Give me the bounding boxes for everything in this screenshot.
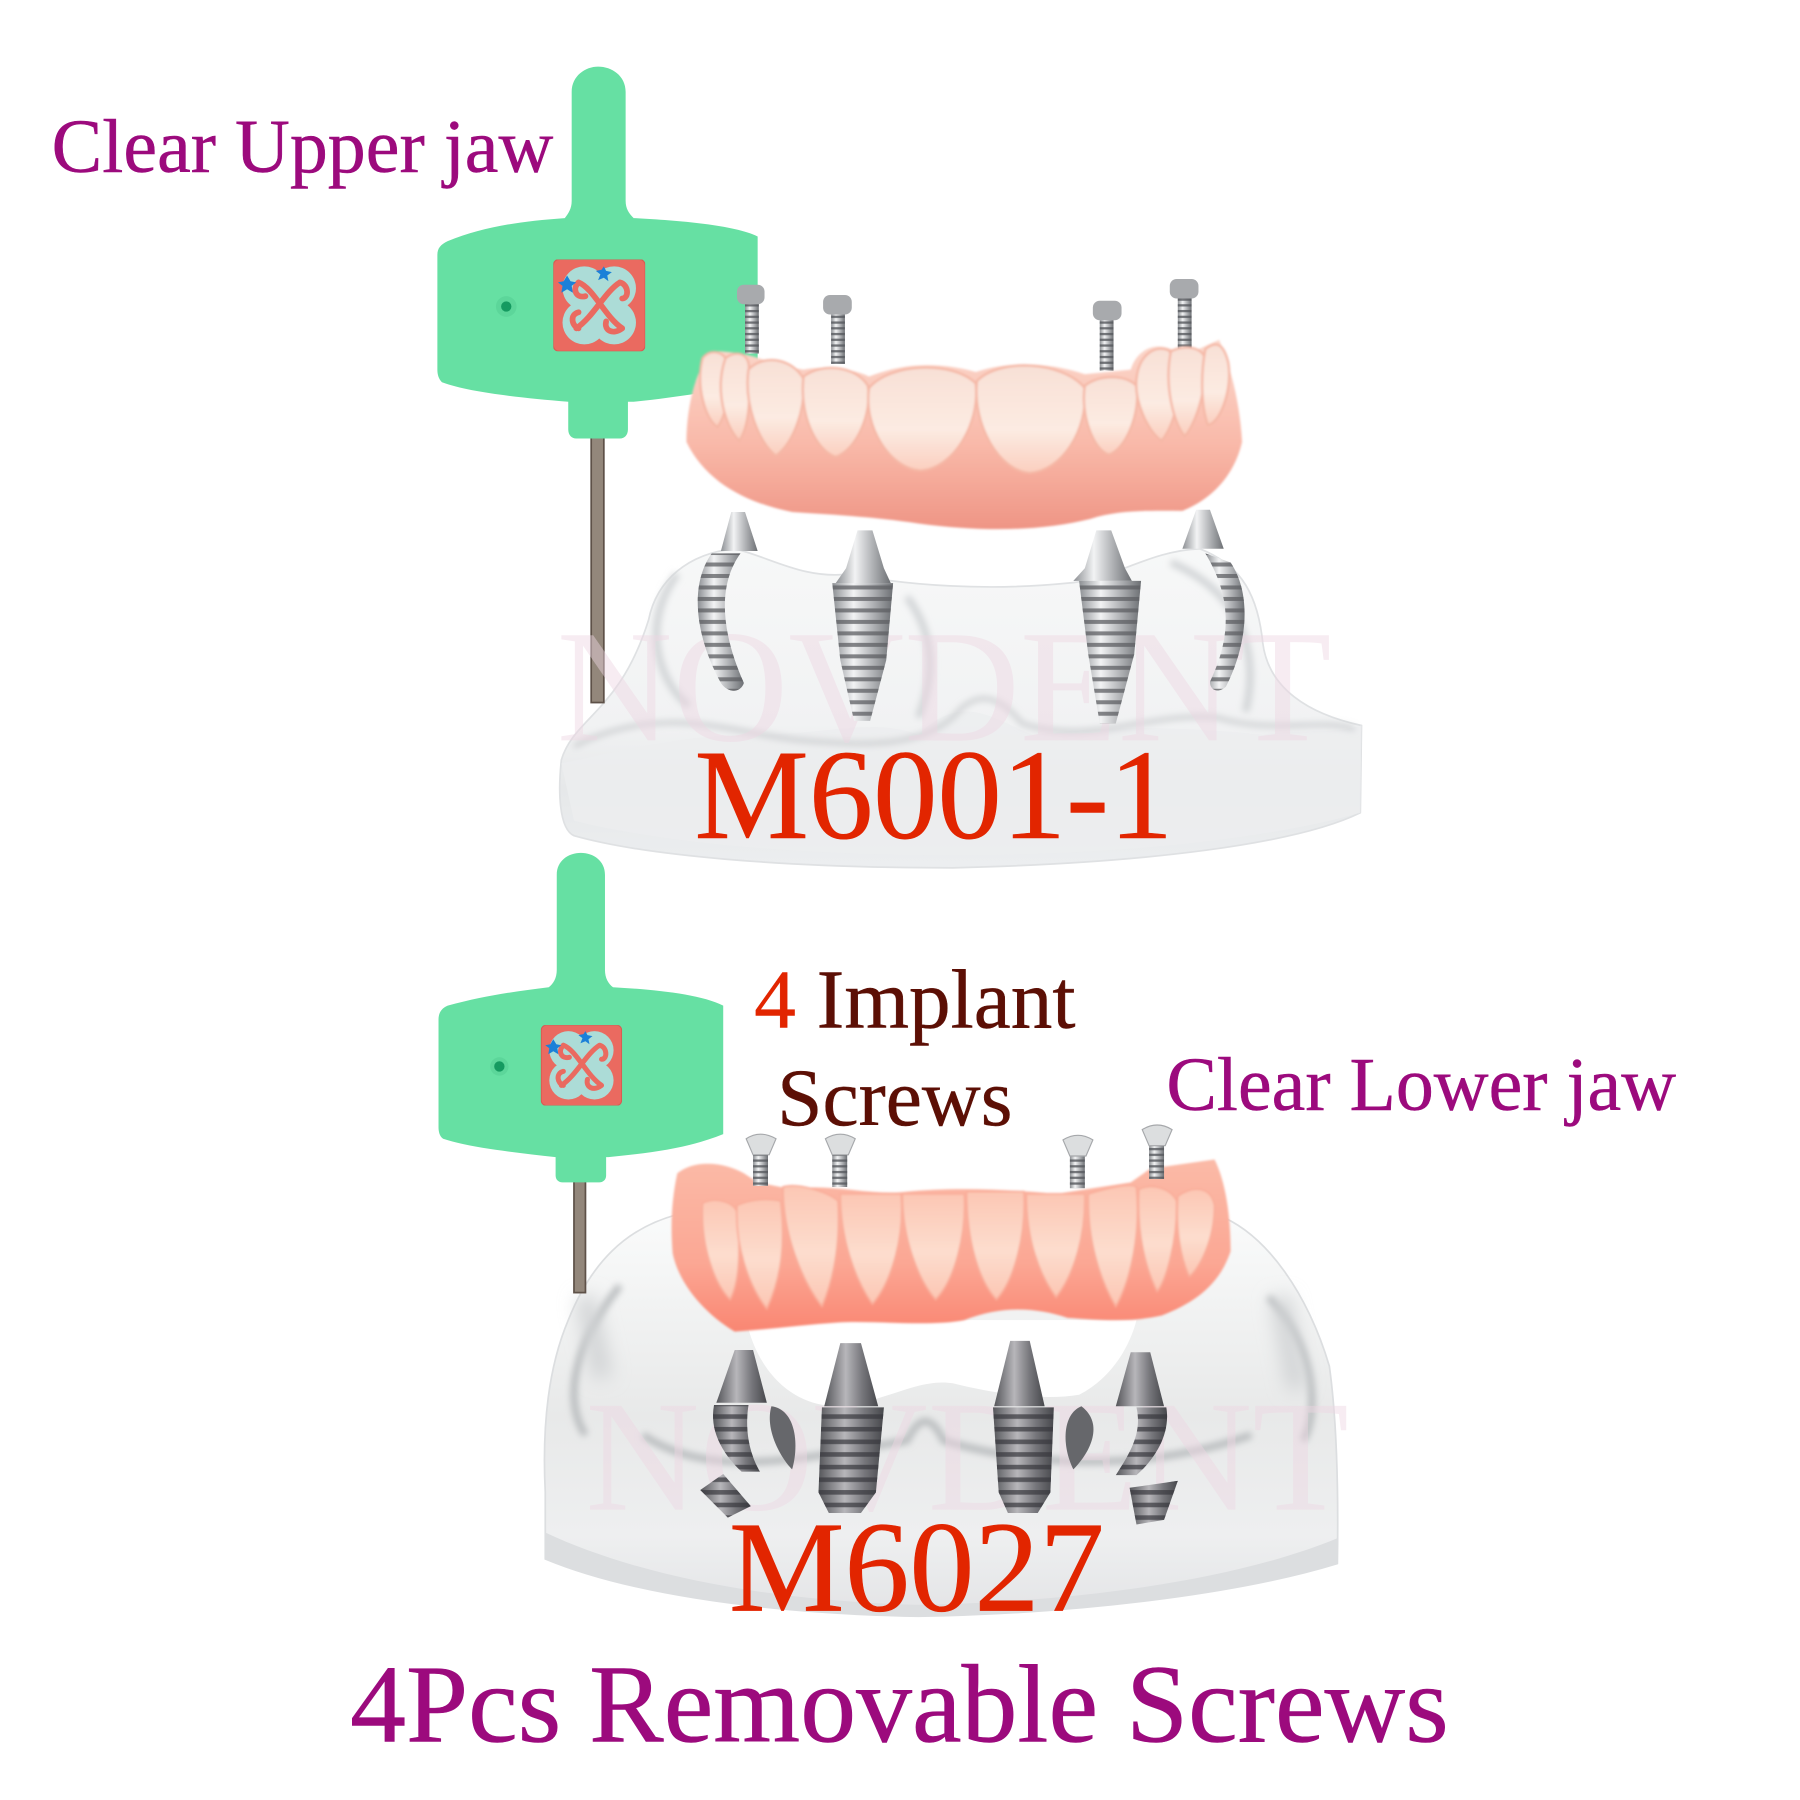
gum: [686, 340, 1242, 529]
label: 4 Implant: 4 Implant: [754, 954, 1075, 1046]
gum: [672, 1159, 1231, 1332]
implant 1: [698, 512, 758, 691]
model number: M6027: M6027: [729, 1496, 1104, 1640]
label: Clear Lower jaw: Clear Lower jaw: [1166, 1043, 1676, 1127]
icon: wrench hole: [496, 296, 517, 317]
implants: lower model: [700, 1341, 1178, 1524]
icon: wrench hole: [490, 1057, 509, 1076]
icon: logo badge: [553, 259, 645, 351]
panel: lower jaw clear base: [544, 1215, 1338, 1616]
label: Screws: Screws: [777, 1052, 1013, 1143]
implant 1: [700, 1350, 795, 1518]
screw 1: [746, 1134, 776, 1186]
screw 1: [737, 285, 765, 354]
upper denture: [686, 340, 1242, 529]
screw 3: [1063, 1135, 1093, 1188]
panel: upper jaw clear base: [560, 549, 1361, 868]
rod: upper wrench shaft: [591, 436, 604, 703]
watermark: NOVDENT lower: NOVDENT: [585, 1370, 1349, 1545]
implant 4: [1066, 1352, 1178, 1524]
implant 4: [1182, 510, 1245, 690]
icon: upper green wrench: [437, 67, 758, 439]
teeth: [702, 1185, 1215, 1309]
screw 4: [1170, 279, 1198, 349]
implant 2: [832, 530, 893, 721]
screw 4: [1142, 1125, 1172, 1179]
implants: upper model: [698, 510, 1245, 723]
screw 2: [825, 1134, 855, 1187]
implant 3: [1073, 530, 1141, 723]
screw 3: [1093, 301, 1122, 371]
watermark: NOVDENT upper: NOVDENT: [557, 597, 1332, 775]
model number: M6001-1: M6001-1: [695, 723, 1173, 866]
implant 2: [818, 1343, 884, 1513]
screws: upper set: [737, 279, 1198, 371]
icon: logo badge: [541, 1025, 622, 1105]
rod: lower wrench shaft: [574, 1180, 585, 1293]
screws: lower set: [746, 1125, 1172, 1188]
icon: lower green wrench: [439, 853, 723, 1182]
lower denture: [672, 1159, 1231, 1332]
teeth: [700, 344, 1229, 473]
screw 2: [823, 295, 852, 364]
implant 3: [993, 1341, 1054, 1513]
footer title: 4Pcs Removable Screws: 4Pcs Removable Screws: [350, 1642, 1449, 1766]
label: Clear Upper jaw: Clear Upper jaw: [52, 105, 554, 189]
